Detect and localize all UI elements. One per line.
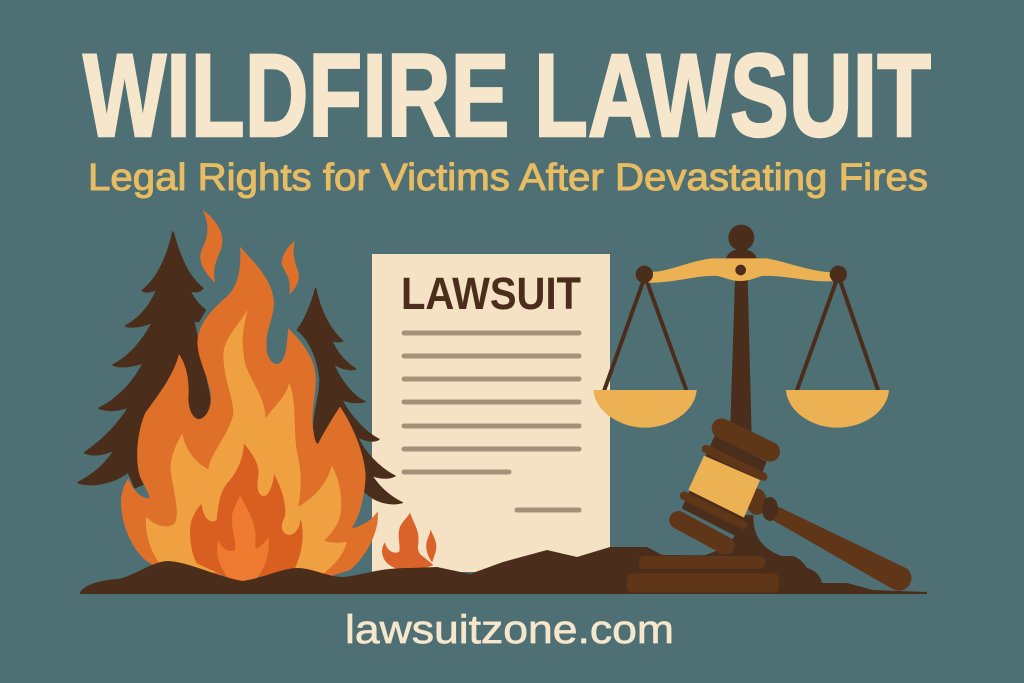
illustration: gavel and base <box>627 428 911 593</box>
icon: handle collar <box>747 488 778 521</box>
icon: scale pan left <box>593 390 697 428</box>
subtitle: Legal Rights for Victims After Devastating Fires <box>88 157 928 199</box>
icon: scale pan right <box>786 390 889 428</box>
icon: floating ember left <box>200 210 222 283</box>
footer website: lawsuitzone.com <box>345 608 674 652</box>
icon: main flame outer <box>121 247 378 578</box>
icon: flame core <box>217 495 269 582</box>
icon: tall pine tree <box>78 232 210 487</box>
icon: flame middle <box>146 309 347 575</box>
icon: floating ember right <box>282 241 299 294</box>
icon: small flame on document <box>382 512 436 570</box>
icon: scale base <box>627 556 779 593</box>
icon: gavel handle <box>773 507 911 591</box>
icon: gavel head <box>678 428 770 546</box>
icon: beam pivots <box>636 265 847 283</box>
document text lines <box>404 333 579 510</box>
illustration: trees and fire <box>78 210 402 582</box>
icon: scale strings <box>604 278 878 391</box>
icon: flame inner <box>190 443 303 582</box>
illustration: scales of justice and gavel <box>593 225 889 557</box>
icon: scale beam <box>648 258 833 283</box>
document heading: LAWSUIT <box>401 268 581 319</box>
panel: lawsuit document <box>372 254 610 572</box>
ground <box>80 547 927 594</box>
icon: small pine tree <box>297 288 402 504</box>
icon: scale post and foot <box>702 225 783 557</box>
